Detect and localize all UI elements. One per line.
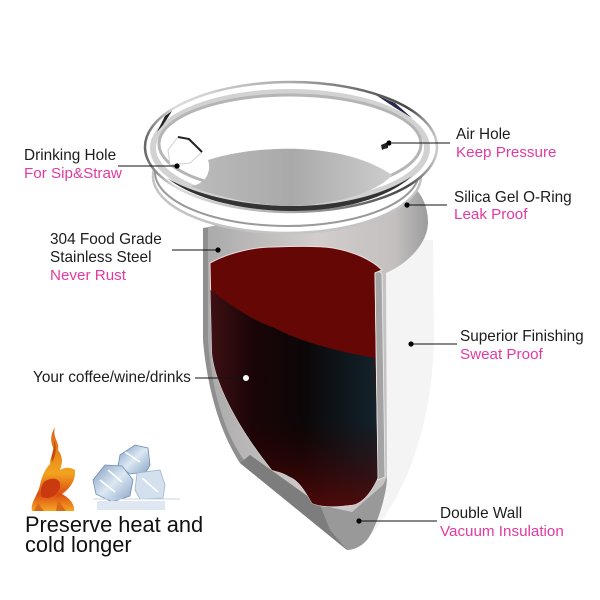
label: superior finishing: Superior Finishing <box>460 328 584 345</box>
steel inner wall <box>203 185 428 550</box>
label: stainless steel: Stainless Steel <box>50 249 152 266</box>
label: air hole: Air Hole <box>456 126 511 143</box>
dark drink <box>210 290 378 506</box>
caption: preserve heat and cold longer <box>25 512 203 557</box>
label: superior finishing: Sweat Proof <box>460 346 544 363</box>
label: air hole: Keep Pressure <box>456 144 556 161</box>
label: double wall <box>440 505 564 540</box>
label: superior finishing <box>460 328 584 363</box>
label: drinking hole: For Sip&Straw <box>24 165 122 182</box>
white outer wall <box>367 240 434 540</box>
lid rim <box>145 82 437 212</box>
tumbler illustration <box>145 82 437 550</box>
label: drinking hole <box>24 147 122 182</box>
label: stainless steel: 304 Food Grade <box>50 231 162 248</box>
icon: flame <box>32 427 75 511</box>
caption: preserve heat and cold longer: cold longer <box>25 532 132 557</box>
icon: ice cubes <box>93 445 180 510</box>
label: stainless steel: Never Rust <box>50 267 127 284</box>
label: silica gel o-ring <box>454 189 572 223</box>
caption: preserve heat and cold longer: Preserve heat and <box>25 512 203 537</box>
o-ring <box>153 119 421 233</box>
label: drinking hole: Drinking Hole <box>24 147 116 164</box>
label: double wall: Double Wall <box>440 505 522 522</box>
drinking hole <box>168 137 202 165</box>
label: double wall: Vacuum Insulation <box>440 523 564 540</box>
label: your drinks: Your coffee/wine/drinks <box>33 369 191 386</box>
air hole <box>381 142 388 150</box>
label: silica gel o-ring: Silica Gel O-Ring <box>454 189 572 206</box>
label: air hole <box>456 126 556 161</box>
label: stainless steel <box>50 231 162 284</box>
label: silica gel o-ring: Leak Proof <box>454 206 528 223</box>
leader lines and markers <box>118 140 457 524</box>
wine <box>210 246 382 506</box>
lid recess <box>190 149 392 206</box>
